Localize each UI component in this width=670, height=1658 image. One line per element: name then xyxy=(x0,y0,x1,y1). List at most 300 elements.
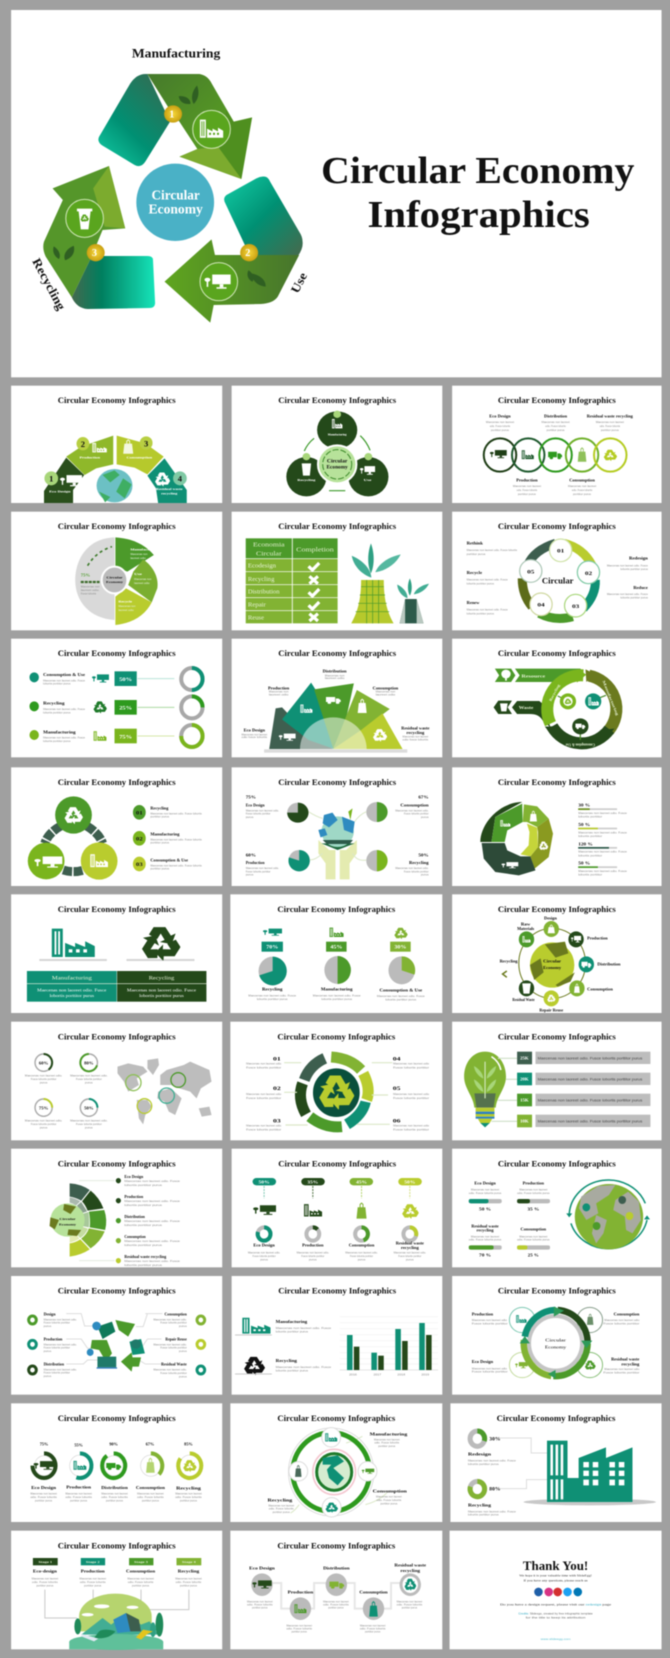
slide 22: isometric recycle: Distribution xyxy=(44,1362,65,1366)
slide 24: circular cycle with four nodes: Fusce lobortis porttitor xyxy=(472,1370,508,1374)
slide 21: globe and progress bars: Production xyxy=(523,1181,545,1185)
rows 5-6 xyxy=(11,894,662,1140)
slide 20: four pills, icons, donuts: Circular Economy Infographics xyxy=(278,1159,396,1169)
slide 12: 3D donut and bars: 30 % xyxy=(578,803,591,808)
slide 21: globe and progress bars: Consumption xyxy=(521,1227,547,1232)
slide 2: three circles: Recycling xyxy=(297,478,315,482)
slide 19: half wheel list: lobortis porttitor purus xyxy=(124,1183,163,1187)
slide 4: half gray half green wheel: laoreet odio xyxy=(134,581,150,585)
slide 11: earth in hands with pies: Fusce lobortis porttitor xyxy=(246,812,271,816)
slide 21: globe and progress bars: 25 % xyxy=(528,1254,539,1258)
slide 30: thank you: for the title to keep its attribution xyxy=(526,1616,586,1619)
slide 17: recycle wheel xyxy=(230,1022,442,1140)
slide 7: three percent rows xyxy=(11,639,222,757)
slide 17: recycle wheel: Fusce lobortis porttitor xyxy=(246,1128,281,1132)
slide 8: fan of five segments xyxy=(232,639,442,757)
slide 3: five linked rings: porttitor purus xyxy=(518,492,536,496)
slide 6: five step ring: lobortis porttitor purus xyxy=(621,596,648,600)
slide 29: zigzag process: porttitor purus xyxy=(402,1606,417,1609)
slide 21: globe and progress bars: Eco Design xyxy=(474,1181,496,1185)
slide 27: factory and two donuts: 30% xyxy=(489,1437,500,1442)
slide 23: bar chart: Maecenas non laoreet odio. Fusce xyxy=(276,1326,332,1330)
slide 25: five ring gauges: 67% xyxy=(146,1442,154,1447)
slide 6: five step ring xyxy=(452,512,662,630)
rows 7-8 xyxy=(11,1149,662,1395)
slide 11: earth in hands with pies: purus xyxy=(246,873,254,877)
slide 16: world map donuts xyxy=(11,1022,222,1140)
slide 22: isometric recycle: Residual Waste xyxy=(161,1362,187,1367)
slide 15: seven node loop: Distribution xyxy=(597,962,621,967)
slide 4: half gray half green wheel: Recycle xyxy=(118,600,132,603)
slide 24: circular cycle with four nodes: Maecenas non laoreet odio xyxy=(604,1367,640,1371)
slide 19: half wheel list: lobortis porttitor purus xyxy=(124,1223,163,1227)
slide 4: half gray half green wheel xyxy=(11,512,222,630)
slide 29: zigzag process xyxy=(230,1531,442,1649)
slide 25: five ring gauges: odio. Fusce lobortis xyxy=(175,1495,202,1499)
slide 13: factory and recycle table: Maecenas non laoreet odio. Fusce xyxy=(37,988,107,993)
slide 10: triangle of circles xyxy=(11,767,222,886)
slide 28: four stages and landscape: Stage 4 xyxy=(182,1560,196,1564)
slide 22: isometric recycle: Fusce lobortis porttitor xyxy=(44,1321,70,1325)
slide 29: zigzag process: odio. Fusce lobortis xyxy=(397,1603,423,1606)
slide 6: five step ring: Renew xyxy=(467,601,481,605)
slide 25: five ring gauges: 55% xyxy=(74,1443,83,1447)
slide 28: four stages and landscape: porttitor purus xyxy=(132,1584,150,1587)
slide 25: five ring gauges: Eco Design xyxy=(31,1486,56,1491)
slide 18: light bulb list: Maecenas non laoreet odio. Fusce lobortis porttitor purus xyxy=(538,1078,642,1081)
slide 22: isometric recycle: Fusce lobortis porttitor xyxy=(160,1321,187,1325)
slide 11: earth in hands with pies: 75% xyxy=(246,796,256,800)
slide 6: five step ring: 03 xyxy=(572,604,580,610)
slide 26: ring with earth: Maecenas non laoreet xyxy=(376,1495,402,1499)
slide 24: circular cycle with four nodes: Consumption xyxy=(614,1312,640,1317)
slide 14: three pies: Circular Economy Infographics xyxy=(277,905,396,915)
slide 15: seven node loop: Consumption xyxy=(587,987,614,992)
slide 20: four pills, icons, donuts: Residual waste xyxy=(396,1241,424,1246)
slide 11: earth in hands with pies: Maecenas non laoreet odio. xyxy=(395,866,429,870)
slide 21: globe and progress bars: odio. Fusce lobortis purus xyxy=(469,1191,502,1195)
slide 27: factory and two donuts: Recycling xyxy=(468,1504,492,1508)
slide 14: three pies: Maecenas non laoreet odio. Fusce xyxy=(377,994,425,998)
slide 22: isometric recycle xyxy=(11,1276,222,1395)
slide 24: circular cycle with four nodes: Maecenas non laoreet odio xyxy=(472,1367,507,1370)
label: manufacturing: Manufacturing xyxy=(132,47,221,61)
slide 21: globe and progress bars: Circular Economy Infographics xyxy=(498,1159,616,1169)
slide 20: four pills, icons, donuts: 45% xyxy=(356,1181,367,1185)
slide 12: 3D donut and bars: lobortis porttitor xyxy=(578,815,602,819)
slide 4: half gray half green wheel: laoreet odio xyxy=(130,556,146,560)
slide 14: three pies: Recycling xyxy=(262,987,284,992)
slide 22: isometric recycle: purus xyxy=(44,1374,52,1378)
slide 8: fan of five segments: Eco Design xyxy=(244,728,266,733)
slide 18: light bulb list: Maecenas non laoreet odio. Fusce lobortis porttitor purus xyxy=(538,1099,642,1102)
slide 17: recycle wheel: Circular Economy Infographics xyxy=(277,1032,396,1042)
slide 17: recycle wheel: Maecenas non laoreet odio xyxy=(246,1124,281,1128)
slide 16: world map donuts: Fusce lobortis porttitor xyxy=(31,1077,56,1081)
badge 2 xyxy=(240,244,258,261)
slide 8: fan of five segments: Distribution xyxy=(323,669,347,673)
slide 22: isometric recycle: Maecenas non laoreet odio. xyxy=(44,1318,77,1321)
center circle xyxy=(136,164,214,241)
slide 17: recycle wheel: 01 xyxy=(273,1057,281,1062)
slide 27: factory and two donuts: Redesign xyxy=(468,1453,491,1457)
slide 13: factory and recycle table xyxy=(11,894,222,1013)
slide 6: five step ring: Maecenas non laoreet odio. Fusce xyxy=(607,564,648,567)
thank you heading: Thank You! xyxy=(523,1560,588,1573)
slide 17: recycle wheel: Fusce lobortis porttitor xyxy=(246,1096,281,1100)
slide 7: three percent rows: 25% xyxy=(119,706,132,711)
slide 8: fan of five segments: Consumption xyxy=(373,686,399,690)
slide 21: globe and progress bars: Residual waste xyxy=(471,1224,499,1228)
slide 21: globe and progress bars: Maecenas non laoreet xyxy=(471,1188,499,1192)
slide 27: factory and two donuts xyxy=(450,1403,662,1522)
slide 25: five ring gauges: porttitor purus xyxy=(35,1499,53,1502)
slide 28: four stages and landscape: Stage 3 xyxy=(134,1560,148,1564)
slide 13: factory and recycle table: Circular Economy Infographics xyxy=(58,905,176,915)
slide 23: bar chart xyxy=(232,1276,442,1395)
slide 20: four pills, icons, donuts: recycling xyxy=(401,1246,420,1250)
slide 12: 3D donut and bars: Maecenas non laoreet odio. Fusce xyxy=(578,869,627,873)
slide 29: zigzag process: Circular Economy Infographics xyxy=(277,1541,396,1551)
slide 3: five linked rings: Distribution xyxy=(544,414,568,419)
slide 12: 3D donut and bars: lobortis porttitor xyxy=(578,873,602,877)
slide 23: bar chart: 2016 xyxy=(349,1373,357,1376)
slide 10: triangle of circles: porttitor purus xyxy=(150,841,170,845)
slide 23: bar chart: Circular Economy Infographics xyxy=(278,1287,396,1296)
slide 22: isometric recycle: Maecenas non laoreet odio. xyxy=(44,1343,77,1346)
slide 22: isometric recycle: Design xyxy=(44,1312,56,1316)
slide 10: triangle of circles: Maecenas non laoreet odio. Fusce lobortis xyxy=(150,864,202,867)
slide 3: five linked rings: Eco Design xyxy=(489,414,511,419)
slide 6: five step ring: Circular xyxy=(542,576,574,585)
slide 26: ring with earth: Manufacturing xyxy=(370,1433,408,1437)
slide 25: five ring gauges: Maecenas non laoreet xyxy=(137,1492,164,1496)
badge 1 xyxy=(164,105,182,123)
slide 29: zigzag process: recycling xyxy=(400,1569,421,1573)
slide 26: ring with earth: porttitor purus xyxy=(378,1444,396,1448)
slide 7: three percent rows: Maecenas non laoreet odio. Fusce xyxy=(43,736,85,740)
slide 28: four stages and landscape: Recycling xyxy=(178,1569,200,1574)
slide 20: four pills, icons, donuts: Fusce lobortis porttitor xyxy=(398,1254,421,1258)
slide 7: three percent rows: 75% xyxy=(119,735,132,740)
slide 30: thank you: Credits: Slidesgo, created by free infographic template xyxy=(518,1612,593,1616)
slide 25: five ring gauges: Maecenas non laoreet xyxy=(65,1492,92,1496)
slide 15: seven node loop: Circular xyxy=(543,959,561,964)
slide 19: half wheel list: Consumption xyxy=(124,1235,146,1239)
slide 11: earth in hands with pies: Maecenas non laoreet odio. xyxy=(246,809,279,812)
slide 20: four pills, icons, donuts xyxy=(232,1149,442,1267)
slide 1: arc of four segments: Circular Economy Infographics xyxy=(58,396,176,406)
slide 11: earth in hands with pies: Maecenas non laoreet odio. xyxy=(395,809,429,812)
slide 17: recycle wheel: 06 xyxy=(393,1119,400,1124)
slide 3: five linked rings: Consumption xyxy=(569,478,596,483)
slide 29: zigzag process: Maecenas non laoreet xyxy=(247,1600,273,1603)
slide 24: circular cycle with four nodes: Maecenas non laoreet odio xyxy=(604,1318,640,1322)
slide 15: seven node loop: Repair Reuse xyxy=(539,1008,563,1013)
slide 20: four pills, icons, donuts: Maecenas non laoreet odio. xyxy=(394,1251,426,1255)
slide 22: isometric recycle: Maecenas non laoreet odio. xyxy=(153,1318,187,1321)
slide 4: half gray half green wheel: Economy xyxy=(106,580,123,584)
slide 20: four pills, icons, donuts: Eco Design xyxy=(253,1243,275,1247)
slide 19: half wheel list: Distribution xyxy=(124,1215,145,1219)
slide 25: five ring gauges xyxy=(11,1403,222,1522)
slide 11: earth in hands with pies: Maecenas non laoreet odio. xyxy=(246,866,279,870)
slide 1: arc of four segments: 1 xyxy=(49,475,53,484)
slide 7: three percent rows: Circular Economy Infographics xyxy=(58,649,176,659)
slide 24: circular cycle with four nodes: Production xyxy=(472,1312,494,1317)
slide 25: five ring gauges: odio. Fusce lobortis xyxy=(30,1495,57,1499)
slide 16: world map donuts: Maecenas non laoreet odio. xyxy=(25,1074,63,1077)
slide 19: half wheel list: Economy xyxy=(59,1223,76,1226)
slide 17: recycle wheel: Maecenas non laoreet odio xyxy=(393,1062,429,1066)
slide 8: fan of five segments: odio fusce lobortis xyxy=(241,735,268,739)
slide 3: five linked rings: porttitor purus xyxy=(573,492,591,496)
slide 18: light bulb list: Maecenas non laoreet odio. Fusce lobortis porttitor purus xyxy=(538,1057,642,1060)
slide 2: three circles: Circular xyxy=(327,459,348,464)
slide 20: four pills, icons, donuts: 50% xyxy=(404,1181,415,1185)
slide 13: factory and recycle table: Recycling xyxy=(149,975,175,981)
slide 20: four pills, icons, donuts: purus xyxy=(260,1258,268,1261)
slide 1: arc of four segments: Production xyxy=(79,456,101,459)
slide 14: three pies: 70% xyxy=(266,945,278,950)
slide 14: three pies: Maecenas non laoreet odio. Fusce xyxy=(313,994,361,997)
slide 25: five ring gauges: porttitor purus xyxy=(106,1499,123,1502)
slide 25: five ring gauges: odio. Fusce lobortis xyxy=(101,1495,128,1499)
slide 18: light bulb list: 15K xyxy=(520,1099,529,1103)
slide 16: world map donuts: 50% xyxy=(84,1107,94,1111)
slide 25: five ring gauges: Circular Economy Infographics xyxy=(58,1414,176,1424)
hero slide xyxy=(11,10,662,377)
slide 10: triangle of circles: Recycling xyxy=(150,806,169,810)
slide 25: five ring gauges: Maecenas non laoreet xyxy=(101,1492,128,1496)
slide 17: recycle wheel: Fusce lobortis porttitor xyxy=(393,1128,429,1132)
slide 19: half wheel list xyxy=(11,1149,222,1267)
slide 27: factory and two donuts: 80% xyxy=(489,1487,500,1492)
slide 29: zigzag process: Production xyxy=(288,1590,314,1595)
slide 16: world map donuts: purus xyxy=(85,1126,93,1130)
slide 2: three circles: Economy xyxy=(326,465,348,470)
slide 23: bar chart: Manufacturing xyxy=(276,1320,308,1324)
slide 7: three percent rows: lobortis porttitor purus xyxy=(43,739,71,743)
slide 25: five ring gauges: porttitor purus xyxy=(70,1499,88,1502)
slide 25: five ring gauges: 90% xyxy=(109,1442,118,1447)
slide 25: five ring gauges: porttitor purus xyxy=(142,1499,159,1502)
slide 3: five linked rings: odio. Fusce lobortis xyxy=(545,424,566,428)
slide 9: resource and waste flow: Circular Economy Infographics xyxy=(498,649,616,659)
slide 19: half wheel list: Maecenas non laoreet odio. Fusce xyxy=(124,1239,180,1243)
slide 3: five linked rings: odio. Fusce lobortis xyxy=(600,424,620,428)
slide 11: earth in hands with pies: 60% xyxy=(246,854,256,858)
slide 26: ring with earth xyxy=(230,1403,442,1522)
slide 22: isometric recycle: Circular Economy Infographics xyxy=(58,1287,176,1296)
slide 25: five ring gauges: Production xyxy=(66,1486,91,1490)
slide 4: half gray half green wheel: Maecenas non xyxy=(134,577,152,581)
slide 29: zigzag process: Maecenas non laoreet xyxy=(286,1624,312,1628)
slide 3: five linked rings: Maecenas non laoreet xyxy=(541,420,570,424)
slide 28: four stages and landscape: Maecenas non laoreet xyxy=(175,1577,202,1581)
slide 19: half wheel list: lobortis porttitor purus xyxy=(124,1263,163,1267)
slide 11: earth in hands with pies: Recycling xyxy=(409,861,430,865)
slide 23: bar chart: Recycling xyxy=(276,1359,298,1363)
slide 21: globe and progress bars: odio. Fusce lobortis purus xyxy=(469,1238,502,1242)
slide 9: resource and waste flow xyxy=(452,639,662,757)
slide 23: bar chart: 2019 xyxy=(421,1373,429,1376)
slide 29: zigzag process: odio. Fusce lobortis xyxy=(247,1603,273,1606)
slide 12: 3D donut and bars: 50 % xyxy=(578,861,591,866)
slide 19: half wheel list: Maecenas non laoreet odio. Fusce xyxy=(124,1179,180,1183)
slide 29: zigzag process: Maecenas non laoreet xyxy=(360,1624,386,1628)
slide 22: isometric recycle: Maecenas non laoreet odio. xyxy=(153,1368,187,1372)
slide 20: four pills, icons, donuts: Fusce lobortis porttitor xyxy=(301,1254,324,1258)
slide 25: five ring gauges: Distribution xyxy=(101,1486,128,1491)
slide 20: four pills, icons, donuts: Maecenas non laoreet odio. xyxy=(248,1251,280,1255)
slide 24: circular cycle with four nodes: Circular Economy Infographics xyxy=(498,1287,616,1296)
slide 28: four stages and landscape: Eco-design xyxy=(33,1569,57,1574)
slide 29: zigzag process: odio. Fusce lobortis xyxy=(360,1627,386,1631)
slide 19: half wheel list: Maecenas non laoreet odio. Fusce xyxy=(124,1259,180,1263)
slide 19: half wheel list: Maecenas non laoreet odio. Fusce xyxy=(124,1219,180,1223)
slide 28: four stages and landscape: Stage 2 xyxy=(86,1560,100,1564)
slide 22: isometric recycle: purus xyxy=(44,1324,52,1328)
slide 3: five linked rings: Maecenas non laoreet xyxy=(486,420,514,424)
slide 24: circular cycle with four nodes: Eco Design xyxy=(472,1360,494,1364)
slide 21: globe and progress bars: odio. Fusce lobortis purus xyxy=(517,1238,550,1242)
slide 22: isometric recycle: purus xyxy=(179,1324,187,1328)
slide 7: three percent rows: lobortis porttitor purus xyxy=(43,682,71,686)
slide 2: three circles: Circular Economy Infographics xyxy=(278,396,396,406)
slide 25: five ring gauges: 85% xyxy=(184,1442,193,1447)
slide 16: world map donuts: Fusce lobortis porttitor xyxy=(76,1077,102,1081)
slide 26: ring with earth: porttitor purus xyxy=(273,1510,290,1514)
slide 18: light bulb list: Maecenas non laoreet odio. Fusce lobortis porttitor purus xyxy=(538,1120,642,1123)
slide 20: four pills, icons, donuts: purus xyxy=(406,1258,414,1261)
slide 18: light bulb list: 10K xyxy=(520,1120,529,1124)
slide 6: five step ring: lobortis porttitor purus xyxy=(467,612,494,616)
slide 7: three percent rows: Maecenas non laoreet odio. Fusce xyxy=(43,679,85,682)
slide 10: triangle of circles: Maecenas non laoreet odio. Fusce lobortis xyxy=(150,812,202,815)
slide 30: thank you: We hope it is your valuable time with SlideEgg! xyxy=(519,1574,592,1578)
icon: recycling bin xyxy=(66,199,103,237)
slide 3: five linked rings: Maecenas non laoreet xyxy=(513,484,541,488)
slide 17: recycle wheel: 03 xyxy=(273,1119,281,1124)
slide 22: isometric recycle: Maecenas non laoreet odio. xyxy=(153,1343,187,1346)
slide 9: resource and waste flow: Manufacturing xyxy=(601,680,619,716)
slide 6: five step ring: Maecenas non laoreet odio. Fusce xyxy=(467,578,508,582)
slide 6: five step ring: 01 xyxy=(557,548,564,554)
slide 15: seven node loop: Production xyxy=(587,936,608,940)
slide 8: fan of five segments: recycling xyxy=(406,731,425,735)
slide 24: circular cycle with four nodes: Fusce lobortis porttitor xyxy=(603,1322,639,1325)
slide 25: five ring gauges: Recycling xyxy=(176,1487,201,1491)
slide 28: four stages and landscape: porttitor purus xyxy=(180,1584,197,1587)
slide 24: circular cycle with four nodes: Fusce lobortis porttitor xyxy=(603,1371,639,1374)
slide 14: three pies: 45% xyxy=(330,945,343,950)
slide 13: factory and recycle table: Manufacturing xyxy=(52,975,93,981)
slide 11: earth in hands with pies: Production xyxy=(246,861,265,865)
slide 11: earth in hands with pies: Consumption xyxy=(400,803,429,807)
slide 19: half wheel list: Residual waste recycling xyxy=(124,1255,167,1259)
slide 7: three percent rows: 50% xyxy=(119,678,132,683)
slide 29: zigzag process: odio. Fusce lobortis xyxy=(286,1627,312,1631)
slide 16: world map donuts: Maecenas non laoreet odio. xyxy=(70,1119,108,1122)
slide 11: earth in hands with pies: 67% xyxy=(418,796,429,800)
slide 3: five linked rings: Residual waste recycling xyxy=(587,414,634,419)
center circle: Circular xyxy=(151,188,200,203)
slide 29: zigzag process: Maecenas non laoreet xyxy=(323,1600,349,1603)
slide 11: earth in hands with pies: 50% xyxy=(418,854,429,858)
slide 11: earth in hands with pies: Fusce lobortis porttitor xyxy=(404,870,429,873)
slide 22: isometric recycle: purus xyxy=(44,1349,52,1353)
slide 24: circular cycle with four nodes: Economy xyxy=(545,1346,567,1350)
slide 23: bar chart: 2017 xyxy=(374,1373,382,1376)
label: use: Use xyxy=(288,270,310,296)
slide 29: zigzag process: Eco Design xyxy=(249,1566,275,1571)
slide 5: table and plants: Repair xyxy=(248,602,267,608)
slide 16: world map donuts: 75% xyxy=(39,1107,48,1111)
slide 6: five step ring: Redesign xyxy=(629,556,649,560)
slide 1: arc of four segments xyxy=(11,386,222,503)
slide 19: half wheel list: Circular xyxy=(59,1217,76,1221)
slide 9: resource and waste flow: Resource xyxy=(521,675,546,679)
slide 12: 3D donut and bars: lobortis porttitor xyxy=(578,834,602,838)
slide 28: four stages and landscape xyxy=(11,1531,222,1650)
slide 10: triangle of circles: 03 xyxy=(136,863,143,868)
slide 28: four stages and landscape: Maecenas non laoreet xyxy=(32,1577,58,1581)
slide 28: four stages and landscape: Production xyxy=(81,1569,105,1574)
slide 14: three pies: Maecenas non laoreet odio. Fusce xyxy=(248,994,296,997)
slide 24: circular cycle with four nodes xyxy=(452,1276,662,1395)
slide 29: zigzag process: porttitor purus xyxy=(328,1606,344,1609)
slide 16: world map donuts: 60% xyxy=(39,1062,48,1066)
slide 8: fan of five segments: Circular Economy Infographics xyxy=(278,649,396,659)
slide 18: light bulb list xyxy=(452,1022,662,1140)
slide 3: five linked rings: porttitor purus xyxy=(547,428,565,432)
slide 16: world map donuts: Circular Economy Infographics xyxy=(58,1032,176,1042)
slide 5: table and plants: Ecodesign xyxy=(248,563,277,569)
slide 20: four pills, icons, donuts: Production xyxy=(302,1243,324,1247)
slide 18: light bulb list: Circular Economy Infographics xyxy=(498,1032,616,1042)
slide 2: three circles: Manufacturing xyxy=(328,433,347,437)
slide 17: recycle wheel: Fusce lobortis porttitor xyxy=(393,1096,429,1100)
slide 26: ring with earth: porttitor purus xyxy=(380,1502,398,1505)
slide 28: four stages and landscape: odio. Fusce lobortis xyxy=(176,1580,202,1584)
slide 3: five linked rings: porttitor purus xyxy=(491,428,509,432)
slide 8: fan of five segments: Maecenas non xyxy=(376,690,396,694)
slide 19: half wheel list: Eco Design xyxy=(124,1175,144,1179)
slide 27: factory and two donuts: Circular Economy Infographics xyxy=(497,1414,616,1424)
badge 2: 2 xyxy=(245,248,251,259)
slide 3: five linked rings: porttitor purus xyxy=(601,428,619,432)
slide 10: triangle of circles: Circular Economy Infographics xyxy=(58,778,176,788)
slide 11: earth in hands with pies: purus xyxy=(421,815,429,819)
slide 6: five step ring: porttitor purus xyxy=(467,552,486,556)
slide 27: factory and two donuts: Maecenas non laoreet odio. Fusce xyxy=(468,1459,516,1463)
slide 21: globe and progress bars: 50 % xyxy=(479,1208,491,1212)
hero title: Infographics xyxy=(368,194,590,236)
slide 6: five step ring: 04 xyxy=(537,602,545,608)
slide 6: five step ring: Recycle xyxy=(467,571,482,575)
slide 19: half wheel list: lobortis porttitor purus xyxy=(124,1243,163,1247)
slide 28: four stages and landscape: odio. Fusce lobortis xyxy=(32,1580,58,1584)
slide 11: earth in hands with pies: Eco Design xyxy=(246,803,265,807)
slide 29: zigzag process: Maecenas non laoreet xyxy=(397,1600,422,1603)
slide 22: isometric recycle: Fusce lobortis porttitor xyxy=(44,1346,70,1350)
slide 28: four stages and landscape: Maecenas non laoreet xyxy=(79,1577,106,1581)
slide 20: four pills, icons, donuts: Maecenas non laoreet odio. xyxy=(297,1251,329,1255)
slide 14: three pies xyxy=(230,894,442,1013)
slide 14: three pies: Consumption & Use xyxy=(379,988,422,992)
rows 1-2 xyxy=(11,386,662,630)
